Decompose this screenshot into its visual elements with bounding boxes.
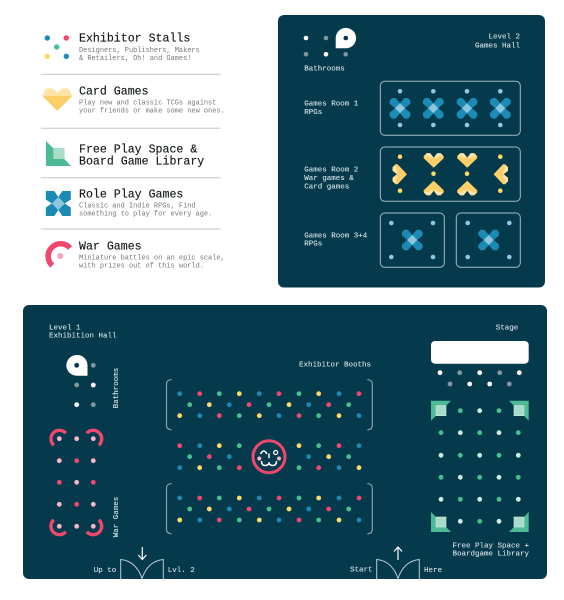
label: stage: Stage xyxy=(496,324,518,332)
level 2 title: Games Hall xyxy=(475,42,520,50)
level 2 title xyxy=(475,34,520,50)
icon: role play cross xyxy=(46,191,71,216)
level 1 title: Exhibition Hall xyxy=(49,333,117,341)
label: bathrooms: Bathrooms xyxy=(304,66,345,74)
arrow: down xyxy=(138,547,146,560)
icon: bathroom pin level 1 xyxy=(66,355,88,376)
description: role play games: Classic and Indie RPGs, Find xyxy=(79,203,196,211)
room 1 xyxy=(380,81,520,135)
entrance start here: Here xyxy=(424,567,442,575)
entrance start here xyxy=(350,560,442,579)
stairs up to level 2 xyxy=(94,560,195,579)
legend xyxy=(41,33,225,270)
description: role play games: something to play for every age. xyxy=(79,211,212,219)
icon: bathroom pin level 2 xyxy=(336,28,356,48)
bathroom dots level 2 xyxy=(304,36,348,57)
heading: war games: War Games xyxy=(79,240,142,253)
description: exhibitor stalls xyxy=(79,47,200,63)
stage dots xyxy=(438,370,522,386)
description: card games: Play new and classic TCGs against xyxy=(79,100,216,108)
label: games room 1: Games Room 1 xyxy=(304,101,359,109)
label: games room 3+4: RPGs xyxy=(304,241,322,249)
label: games room 1 xyxy=(304,101,359,117)
stage xyxy=(431,341,529,364)
description: war games xyxy=(79,254,225,270)
legend item: war games xyxy=(48,240,225,270)
stairs up to level 2: Up to xyxy=(94,567,117,575)
war games area xyxy=(51,430,102,535)
legend item: card games xyxy=(42,85,225,116)
booth block middle xyxy=(177,443,361,470)
description: card games xyxy=(79,100,225,116)
level 1 title: Level 1 xyxy=(49,325,81,333)
bathroom dots level 1 xyxy=(74,363,96,407)
heading: exhibitor stalls: Exhibitor Stalls xyxy=(79,33,190,46)
icon: free play corner xyxy=(46,141,71,166)
description: war games: with prizes out of this world. xyxy=(79,262,204,270)
heading: free play: Free Play Space & xyxy=(79,143,197,156)
label: free play space xyxy=(452,542,529,559)
legend item: free play xyxy=(46,141,204,169)
label: games room 2 xyxy=(304,166,358,192)
label: bathrooms vertical: Bathrooms xyxy=(113,368,121,408)
icon: exhibitor dots xyxy=(45,35,69,59)
label: war games vertical: War Games xyxy=(113,497,121,537)
entrance start here: Start xyxy=(350,567,373,575)
heading: free play xyxy=(79,143,204,169)
level 1 title xyxy=(49,325,117,341)
arrow: up xyxy=(394,547,402,560)
description: exhibitor stalls: & Retailers, Oh! and Games! xyxy=(79,55,191,63)
panel: level 1 exhibition hall xyxy=(23,305,547,579)
description: exhibitor stalls: Designers, Publishers, Makers xyxy=(79,47,200,55)
heading: free play: Board Game Library xyxy=(79,156,204,169)
icon: card heart xyxy=(42,88,72,111)
room 2 xyxy=(380,147,520,201)
panel: level 2 games hall xyxy=(278,15,545,288)
label: games room 3+4 xyxy=(304,232,368,249)
label: games room 2: War games & xyxy=(304,175,354,183)
label: games room 2: Card games xyxy=(304,184,349,192)
heading: card games: Card Games xyxy=(79,85,149,98)
room 3 xyxy=(380,213,444,267)
stairs up to level 2: Lvl. 2 xyxy=(168,567,195,575)
icon: smiling face xyxy=(253,441,285,473)
free play area xyxy=(431,401,529,532)
icon: war games arc xyxy=(48,244,70,266)
description: card games: your friends or make some new ones. xyxy=(79,108,225,116)
legend item: exhibitor stalls xyxy=(45,33,200,63)
label: games room 2: Games Room 2 xyxy=(304,166,358,174)
label: games room 1: RPGs xyxy=(304,109,322,117)
room 4 xyxy=(456,213,520,267)
label: games room 3+4: Games Room 3+4 xyxy=(304,232,368,240)
label: exhibitor booths: Exhibitor Booths xyxy=(299,362,371,370)
description: war games: Miniature battles on an epic scale, xyxy=(79,254,225,262)
label: free play space: Boardgame Library xyxy=(452,551,529,559)
legend item: role play games xyxy=(46,188,212,219)
level 2 title: Level 2 xyxy=(488,34,520,42)
label: free play space: Free Play Space + xyxy=(452,542,529,550)
heading: role play games: Role Play Games xyxy=(79,188,183,201)
booth block bottom xyxy=(166,484,372,534)
description: role play games xyxy=(79,203,212,219)
booth block top xyxy=(166,380,372,430)
